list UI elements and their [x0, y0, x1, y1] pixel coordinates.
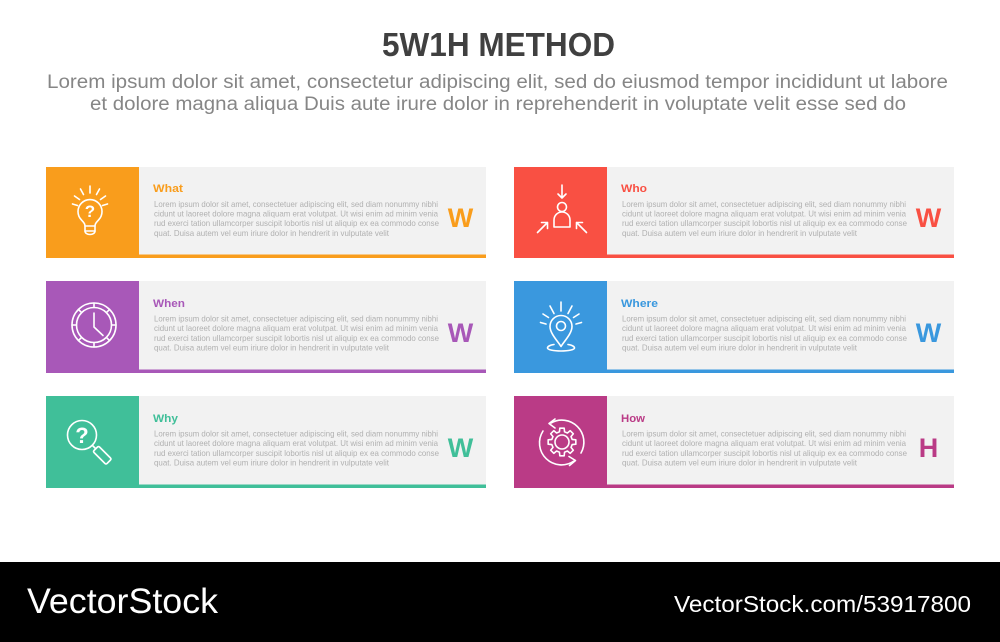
body text: how: rud exerci tation ullamcorper suscipit lobortis nisl ut aliquip ex ea commodo conse	[622, 449, 907, 458]
body text: who: cidunt ut laoreet dolore magna aliquam erat volutpat. Ut wisi enim ad minim venia	[622, 210, 906, 218]
panel: when	[46, 281, 486, 373]
body text: how: quat. Duisa autem vel eum iriure dolor in hendrerit in vulputate velit	[622, 458, 858, 468]
body text: why: quat. Duisa autem vel eum iriure dolor in hendrerit in vulputate velit	[154, 458, 390, 468]
body text: who: rud exerci tation ullamcorper suscipit lobortis nisl ut aliquip ex ea commodo conse	[622, 219, 907, 228]
icon: magnifier with question mark: ?	[75, 423, 89, 448]
letter: W: W	[448, 318, 474, 348]
letter: H: H	[919, 433, 938, 463]
footer logo text: VectorStock	[27, 582, 219, 621]
body text: how: Lorem ipsum dolor sit amet, consectetuer adipiscing elit, sed diam nonummy nibhi	[622, 430, 906, 438]
body text: when: quat. Duisa autem vel eum iriure dolor in hendrerit in vulputate velit	[154, 344, 390, 352]
body text: why: Lorem ipsum dolor sit amet, consectetuer adipiscing elit, sed diam nonummy nibhi	[154, 430, 438, 438]
heading: why: Why	[153, 413, 179, 425]
subtitle text block: et dolore magna aliqua Duis aute irure dolor in reprehenderit in voluptate velit esse sed do	[90, 94, 906, 115]
letter: W: W	[916, 318, 942, 348]
body text: why	[154, 430, 439, 468]
icon: light bulb with question mark: ?	[85, 202, 95, 221]
body text: what: cidunt ut laoreet dolore magna aliquam erat volutpat. Ut wisi enim ad minim venia	[154, 210, 438, 218]
body text: what: quat. Duisa autem vel eum iriure dolor in hendrerit in vulputate velit	[154, 229, 390, 238]
icon: light bulb with question mark	[72, 186, 108, 234]
body text: where: rud exerci tation ullamcorper suscipit lobortis nisl ut aliquip ex ea commodo conse	[622, 334, 907, 343]
body text: when	[154, 314, 439, 352]
body text: when: Lorem ipsum dolor sit amet, consectetuer adipiscing elit, sed diam nonummy nibhi	[154, 314, 438, 324]
heading: how: How	[621, 413, 645, 425]
body text: when: rud exerci tation ullamcorper suscipit lobortis nisl ut aliquip ex ea commodo conse	[154, 334, 439, 343]
letter: W: W	[448, 203, 474, 233]
subtitle text block: Lorem ipsum dolor sit amet, consectetur adipiscing elit, sed do eiusmod tempor incididunt ut labore	[47, 72, 948, 93]
icon: clock	[72, 303, 116, 347]
body text: how: cidunt ut laoreet dolore magna aliquam erat volutpat. Ut wisi enim ad minim venia	[622, 439, 906, 448]
heading: what: What	[153, 183, 183, 195]
icon: person with incoming arrows	[538, 185, 586, 232]
body text: where	[622, 314, 907, 352]
body text: where: quat. Duisa autem vel eum iriure dolor in hendrerit in vulputate velit	[622, 344, 858, 352]
body text: how	[622, 430, 907, 468]
subtitle text block	[47, 72, 948, 115]
panel: where	[514, 281, 954, 373]
panel: how	[514, 396, 954, 488]
body text: why: rud exerci tation ullamcorper suscipit lobortis nisl ut aliquip ex ea commodo conse	[154, 449, 439, 458]
title: 5W1H METHOD	[382, 26, 615, 63]
icon: magnifier with question mark	[68, 420, 111, 464]
body text: when: cidunt ut laoreet dolore magna aliquam erat volutpat. Ut wisi enim ad minim venia	[154, 324, 438, 333]
body text: where: cidunt ut laoreet dolore magna aliquam erat volutpat. Ut wisi enim ad minim venia	[622, 324, 906, 333]
footer image id: VectorStock.com/53917800	[674, 591, 971, 617]
panel: why	[46, 396, 486, 488]
letter: W: W	[448, 433, 474, 463]
body text: what	[154, 200, 439, 238]
heading: where: Where	[621, 298, 658, 310]
heading: when: When	[153, 298, 185, 310]
body text: why: cidunt ut laoreet dolore magna aliquam erat volutpat. Ut wisi enim ad minim venia	[154, 439, 438, 448]
panel: what	[46, 167, 486, 258]
letter: W: W	[916, 203, 942, 233]
body text: who: quat. Duisa autem vel eum iriure dolor in hendrerit in vulputate velit	[622, 229, 858, 238]
body text: who	[622, 200, 907, 238]
body text: what: Lorem ipsum dolor sit amet, consectetuer adipiscing elit, sed diam nonummy nibhi	[154, 200, 438, 209]
icon: location pin with rays	[540, 302, 582, 351]
icon: gear with circular arrows	[540, 419, 584, 466]
heading: who: Who	[621, 183, 647, 195]
body text: where: Lorem ipsum dolor sit amet, consectetuer adipiscing elit, sed diam nonummy nibhi	[622, 314, 906, 324]
panel: who	[514, 167, 954, 258]
footer bar	[0, 562, 1000, 642]
body text: who: Lorem ipsum dolor sit amet, consectetuer adipiscing elit, sed diam nonummy nibhi	[622, 200, 906, 209]
body text: what: rud exerci tation ullamcorper suscipit lobortis nisl ut aliquip ex ea commodo conse	[154, 219, 439, 228]
